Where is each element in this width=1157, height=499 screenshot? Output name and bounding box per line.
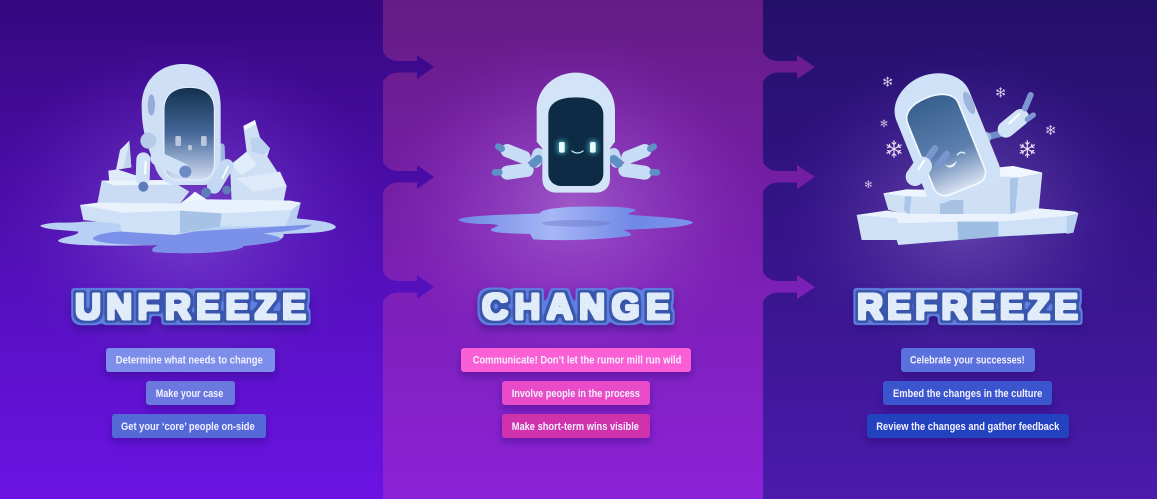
glowing eyes and smile	[557, 140, 598, 154]
robot head tilted	[885, 62, 1005, 208]
arrow 4	[762, 50, 815, 84]
button: Review the changes and gather feedback	[867, 414, 1069, 438]
panel: unfreeze	[0, 0, 385, 499]
robot shadow	[542, 220, 610, 227]
background glow: change	[382, 35, 762, 375]
left arms	[495, 147, 538, 173]
arrow 3	[382, 270, 434, 304]
illustration: floating robot above puddle	[458, 73, 693, 240]
button: Make your case	[146, 381, 235, 405]
panel: change	[382, 0, 763, 499]
ice rocks right	[230, 120, 287, 203]
robot helmet	[142, 64, 221, 185]
robot screen	[901, 87, 989, 199]
button: Involve people in the process: Involve people in the process	[512, 388, 640, 400]
robot screen	[548, 97, 603, 186]
ice block left	[97, 141, 189, 203]
button: Make short-term wins visible	[502, 414, 650, 438]
smile and winking eye	[944, 152, 965, 167]
illustration: robot frozen in melting ice	[40, 64, 336, 253]
button: Review the changes and gather feedback: Review the changes and gather feedback	[876, 421, 1060, 433]
water puddle	[458, 207, 693, 240]
button: Get your core people on-side: Get your ‘core’ people on-side	[121, 421, 255, 433]
helmet ear	[148, 94, 155, 116]
arrows: change into refreeze	[762, 50, 815, 304]
button: Embed the changes in the culture	[883, 381, 1052, 405]
illustration: robot dabbing on refrozen ice	[857, 62, 1078, 245]
title: REFREEZE: REFREEZE	[857, 286, 1078, 327]
panel: refreeze	[763, 0, 1157, 499]
background glow: refreeze	[777, 50, 1147, 380]
ice floe	[80, 192, 301, 235]
robot front arm	[915, 148, 947, 177]
arrow 6	[762, 270, 815, 304]
button: Determine what needs to change: Determine what needs to change	[116, 355, 263, 367]
robot arms	[138, 133, 231, 198]
right arms	[614, 147, 657, 173]
button: Celebrate your successes	[901, 348, 1035, 372]
title: UNFREEZE: UNFREEZE	[75, 286, 306, 327]
faint eyes and mouth	[175, 136, 207, 150]
button: Communicate	[461, 348, 691, 372]
robot screen	[164, 87, 214, 180]
arrow 5	[762, 160, 815, 194]
button: Make short-term wins visible: Make short-term wins visible	[512, 421, 639, 433]
arrow 2	[382, 160, 434, 194]
robot back arm	[211, 147, 232, 165]
robot helmet	[885, 62, 1005, 208]
puddle shadow	[93, 225, 312, 253]
button: Embed the changes in the culture: Embed the changes in the culture	[893, 388, 1042, 400]
arrows: unfreeze into change	[382, 50, 434, 304]
meltwater puddle	[40, 218, 336, 253]
arrow 1	[382, 50, 434, 84]
button: Celebrate your successes: Celebrate your successes!	[910, 355, 1025, 367]
robot helmet	[537, 73, 615, 193]
background glow: unfreeze	[0, 40, 385, 390]
button: Communicate: Communicate! Don’t let the rumor mill run wild	[473, 355, 681, 367]
button: Get your core people on-side	[112, 414, 266, 438]
helmet ear	[961, 90, 978, 116]
upper ice block	[883, 166, 1042, 215]
title: CHANGE: CHANGE	[482, 286, 670, 327]
button: Determine what needs to change	[106, 348, 275, 372]
button: Involve people in the process	[502, 381, 650, 405]
button: Make your case: Make your case	[156, 388, 223, 400]
snowflakes	[865, 77, 1055, 188]
robot raised arm	[981, 95, 1033, 143]
lower ice floe	[857, 208, 1078, 245]
